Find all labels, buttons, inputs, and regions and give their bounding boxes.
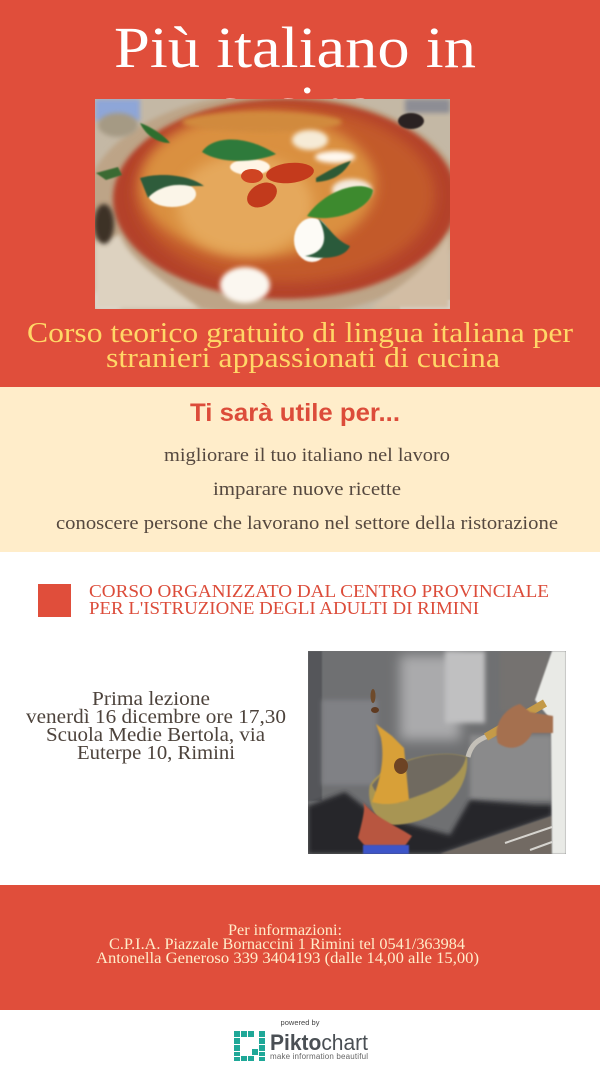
first lesson details: venerdì 16 dicembre ore 17,30 — [26, 706, 286, 728]
subtitle: Corso teorico gratuito di lingua italiana per — [27, 318, 574, 349]
panel: contact information — [0, 885, 600, 1010]
contact text: Antonella Generoso 339 3404193 (dalle 14,00 alle 15,00) — [96, 950, 479, 967]
contact text: C.P.I.A. Piazzale Bornaccini 1 Rimini tel 0541/363984 — [109, 936, 465, 953]
first lesson details: Prima lezione — [92, 688, 210, 710]
first lesson details: Euterpe 10, Rimini — [77, 742, 235, 764]
Piktochart logo — [234, 1018, 368, 1061]
benefits list — [56, 445, 558, 534]
panel: benefits — [0, 387, 600, 552]
benefits list: conoscere persone che lavorano nel settore della ristorazione — [56, 513, 558, 534]
contact text — [96, 922, 479, 967]
tagline: make information beautiful — [270, 1052, 368, 1061]
benefits list: imparare nuove ricette — [213, 479, 401, 500]
photo: pizza — [95, 99, 450, 309]
icon: red square — [38, 584, 71, 617]
panel: header background — [0, 0, 600, 387]
benefits list: migliorare il tuo italiano nel lavoro — [164, 445, 450, 466]
organizer heading: CORSO ORGANIZZATO DAL CENTRO PROVINCIALE — [89, 581, 549, 601]
photo: chef tossing pasta in a pan — [308, 651, 566, 854]
icon: teal squares — [234, 1031, 265, 1061]
organizer heading — [89, 581, 549, 618]
subtitle: stranieri appassionati di cucina — [106, 343, 501, 374]
benefits heading: Ti sarà utile per... — [190, 399, 400, 427]
first lesson details: Scuola Medie Bertola, via — [46, 724, 265, 746]
title second line, partly hidden by photo: cucina — [214, 74, 374, 139]
wordmark: Piktochart — [270, 1030, 368, 1055]
contact text: Per informazioni: — [228, 922, 342, 939]
first lesson details — [26, 688, 286, 764]
powered by caption: powered by — [280, 1018, 320, 1027]
organizer heading: PER L'ISTRUZIONE DEGLI ADULTI DI RIMINI — [89, 598, 479, 618]
title: Più italiano in — [114, 15, 476, 80]
subtitle — [27, 318, 574, 374]
